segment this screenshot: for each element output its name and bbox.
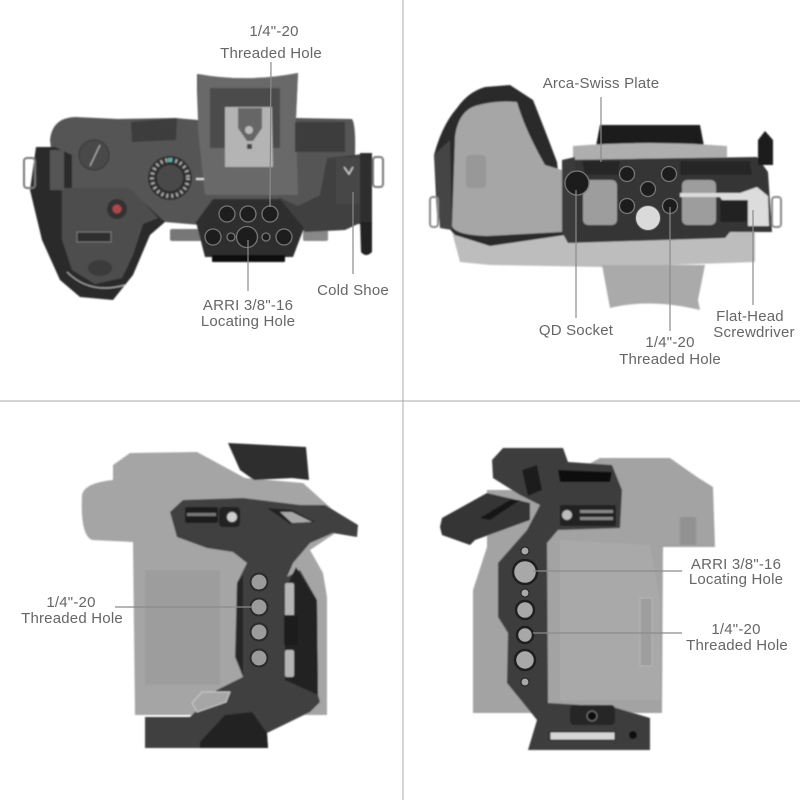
label: ARRI locating hole: ARRI 3/8"-16	[203, 297, 293, 314]
label: threaded hole: Threaded Hole	[686, 637, 788, 654]
label: threaded hole: Threaded Hole	[619, 351, 721, 368]
label: arca-swiss plate	[543, 75, 659, 162]
eyecup	[602, 265, 705, 310]
camera silhouette	[473, 458, 715, 713]
ARRI plate	[196, 199, 304, 257]
label: threaded hole	[220, 23, 322, 207]
cage frame	[492, 448, 650, 750]
top lever	[228, 443, 309, 480]
mode dial	[79, 140, 109, 170]
ghost body	[452, 225, 755, 267]
top knob	[131, 118, 177, 142]
label: threaded hole: 1/4"-20	[645, 334, 695, 351]
cage holes	[513, 547, 537, 686]
label: threaded hole: Threaded Hole	[220, 45, 322, 62]
lugs	[24, 158, 35, 188]
panel: left side of camera cage	[21, 443, 358, 748]
top slot	[267, 508, 315, 524]
panel: right side of camera cage	[440, 448, 788, 750]
label: ARRI locating hole: Locating Hole	[201, 313, 295, 330]
rear section	[285, 567, 318, 695]
label: flat-head screwdriver: Screwdriver	[713, 324, 795, 341]
lower slot	[192, 692, 230, 712]
label: cold shoe: Cold Shoe	[317, 282, 389, 299]
rail	[560, 505, 616, 526]
camera silhouette	[82, 452, 340, 715]
battery door	[560, 540, 660, 700]
rail	[185, 507, 240, 527]
panel: bottom view of camera cage	[430, 75, 795, 368]
label: threaded hole	[619, 207, 721, 368]
label: ARRI locating hole: Locating Hole	[689, 571, 783, 588]
cage grip	[145, 498, 358, 748]
grip	[452, 102, 562, 236]
left grip	[30, 147, 165, 300]
plate holes	[205, 206, 292, 248]
carbon texture	[200, 712, 268, 748]
label: cold shoe	[317, 192, 389, 299]
label: threaded hole	[533, 621, 788, 654]
grip holes	[250, 574, 268, 666]
plate recesses	[582, 161, 752, 175]
label: flat-head screwdriver: Flat-Head	[716, 308, 784, 325]
flat-head screwdriver	[680, 187, 769, 226]
arca top	[596, 125, 704, 146]
plate holes	[565, 166, 678, 214]
screw	[636, 206, 660, 230]
top slots	[522, 465, 542, 496]
dial ring	[148, 156, 192, 200]
label: threaded hole	[21, 594, 252, 627]
base	[550, 705, 637, 740]
lens collar	[573, 143, 727, 160]
label: threaded hole: Threaded Hole	[21, 610, 123, 627]
knurl	[284, 615, 298, 645]
top post	[758, 131, 773, 165]
label: flat-head screwdriver	[713, 210, 795, 341]
camera body top	[50, 73, 355, 228]
label: threaded hole: 1/4"-20	[46, 594, 96, 611]
record button	[107, 199, 127, 219]
right cage	[278, 153, 372, 232]
label: ARRI locating hole	[201, 240, 295, 330]
hot shoe	[225, 107, 273, 167]
label: arca-swiss plate: Arca-Swiss Plate	[543, 75, 659, 92]
label: ARRI locating hole	[533, 556, 783, 588]
plate	[562, 157, 772, 243]
label: threaded hole: 1/4"-20	[711, 621, 761, 638]
panel: top view of camera cage	[24, 23, 389, 330]
plate windows	[583, 180, 716, 225]
cage wing	[440, 493, 530, 545]
label: threaded hole: 1/4"-20	[249, 23, 299, 40]
label: ARRI locating hole: ARRI 3/8"-16	[691, 556, 781, 573]
grip cage	[434, 85, 565, 246]
lightening slots	[285, 583, 294, 677]
lens ridges	[170, 229, 328, 241]
thumb wheel	[77, 232, 111, 242]
label: QD socket: QD Socket	[539, 322, 614, 339]
